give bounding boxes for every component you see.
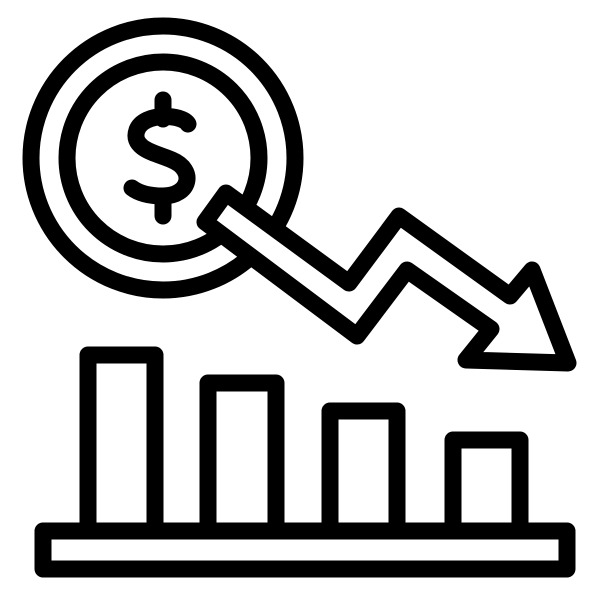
- bar chart: declining bars: [43, 355, 567, 569]
- icon: magnifying coin: [31, 26, 295, 290]
- arrow: downward zigzag trend: [205, 193, 568, 363]
- icon: dollar sign: [132, 100, 188, 216]
- base: [43, 531, 567, 569]
